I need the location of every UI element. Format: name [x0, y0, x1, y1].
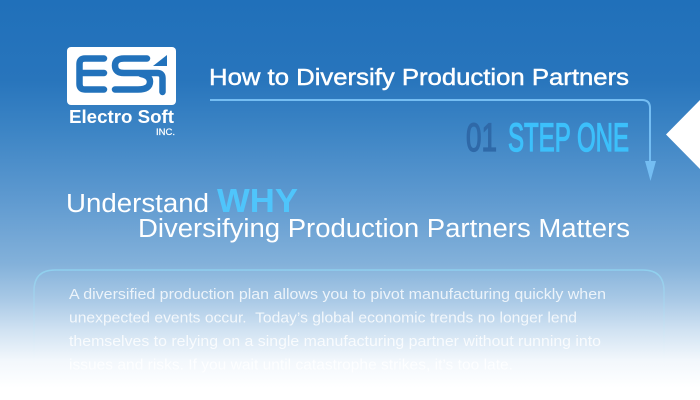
panel text — [69, 287, 606, 374]
logo plate — [67, 47, 176, 105]
panel outline — [34, 270, 664, 375]
panel text: unexpected events occur. Today’s global economic trends no longer lend — [69, 310, 577, 326]
white side pointer — [666, 100, 700, 169]
arrow: title to step connector — [210, 100, 656, 181]
logo mark: ES1 monogram — [80, 58, 162, 92]
heading line 2: Diversifying Production Partners Matters — [138, 215, 630, 243]
panel: description — [34, 270, 664, 375]
panel text: A diversified production plan allows you to pivot manufacturing quickly when — [69, 287, 606, 303]
step number: 01 — [466, 116, 497, 160]
logo: Electro Soft — [67, 47, 176, 138]
title: How to Diversify Production Partners — [209, 64, 629, 90]
panel text: issues and risks. If you wait until catastrophe strikes, it’s too late. — [69, 358, 513, 374]
heading — [66, 182, 630, 243]
heading line 1: Understand — [66, 190, 209, 218]
logo wordmark: Electro Soft — [69, 107, 174, 127]
step label — [466, 116, 629, 160]
logo suffix: INC. — [156, 127, 175, 138]
panel text: themselves to relying on a single manufacturing partner without running into — [69, 334, 601, 350]
heading emphasis: WHY — [217, 182, 298, 219]
